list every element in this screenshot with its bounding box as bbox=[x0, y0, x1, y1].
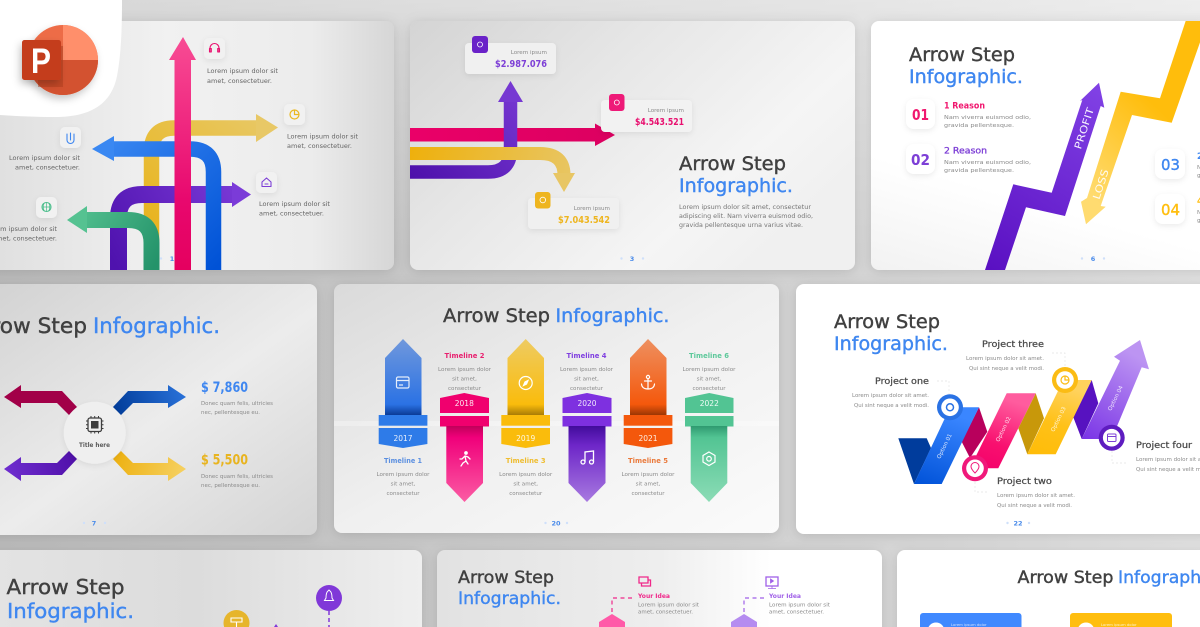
hub circle bbox=[64, 402, 126, 464]
item: 02: 02 bbox=[911, 151, 930, 169]
page number bbox=[544, 520, 568, 528]
timeline 2022: consectetur bbox=[692, 386, 726, 392]
item: 01: Nam viverra euismod odio, bbox=[944, 115, 1031, 121]
timeline 2020: Lorem ipsum dolor bbox=[560, 367, 614, 373]
panel: slide bottom right cards bbox=[897, 550, 1200, 627]
timeline 2019 bbox=[499, 339, 553, 497]
item: headphones: amet, consectetuer. bbox=[207, 78, 272, 85]
node: project one: Qui sint neque a velit modi. bbox=[854, 403, 929, 409]
idea: pink bbox=[599, 577, 700, 627]
timeline 2017 bbox=[376, 339, 430, 497]
item: paperclip: Lorem ipsum dolor sit bbox=[9, 155, 81, 162]
item: headphones: Lorem ipsum dolor sit bbox=[207, 68, 279, 75]
panel: slide 20 timeline bbox=[334, 284, 779, 533]
ribbon arrow: Option 01 bbox=[936, 433, 954, 460]
arrow: yellow right bbox=[144, 114, 278, 242]
panel: slide 6 profit and loss bbox=[871, 0, 1200, 270]
icon: PowerPoint logo: P bbox=[31, 42, 51, 81]
timeline 2019: consectetur bbox=[509, 491, 543, 497]
panel: slide 1 crossing arrows bbox=[0, 21, 394, 272]
heading: Arrow Step bbox=[6, 575, 124, 599]
item: home bbox=[256, 172, 331, 218]
card: yellow value: $7.043.542 bbox=[558, 215, 610, 226]
heading: Arrow Step bbox=[458, 568, 554, 588]
timeline 2021: Timeline 5 bbox=[628, 457, 668, 465]
value: 5,500: Donec quam felis, ultricies bbox=[201, 474, 273, 480]
panel: slide 22 ribbon arrow bbox=[796, 284, 1200, 534]
timeline 2020: consectetur bbox=[570, 386, 604, 392]
panel: slide 7 hub arrows bbox=[0, 284, 317, 535]
timeline 2022: sit amet, bbox=[697, 376, 722, 382]
item: 04: 04 bbox=[1161, 201, 1180, 219]
panel: slide bottom middle ideas bbox=[437, 550, 882, 627]
node: project one: Project one bbox=[875, 377, 929, 387]
heading: Infographic. bbox=[679, 175, 793, 197]
value: 5,500: $ 5,500 bbox=[201, 452, 248, 468]
node: project one: Lorem ipsum dolor sit amet. bbox=[852, 393, 929, 399]
icon: gear bbox=[703, 452, 715, 466]
timeline 2021: Lorem ipsum dolor bbox=[622, 472, 675, 478]
page number: 1 bbox=[170, 255, 175, 263]
card: yellow: Lorem ipsum dolor bbox=[1101, 622, 1137, 627]
card: blue: Lorem ipsum dolor bbox=[951, 622, 987, 627]
icon: anchor bbox=[642, 375, 654, 389]
icon: runner bbox=[460, 452, 470, 466]
white corner badge bbox=[0, 0, 122, 117]
idea: purple bbox=[731, 577, 831, 627]
timeline 2021: sit amet, bbox=[636, 482, 661, 488]
item: 01: 01 bbox=[912, 106, 929, 124]
ribbon arrow: Option 04 bbox=[1107, 385, 1125, 412]
heading bbox=[6, 575, 134, 623]
timeline 2019: Timeline 3 bbox=[506, 457, 546, 465]
value: 7,860 bbox=[201, 380, 273, 416]
heading bbox=[834, 311, 948, 355]
node: project two: Lorem ipsum dolor sit amet. bbox=[997, 493, 1075, 499]
arrow: green left bbox=[67, 206, 152, 272]
timeline 2022: 2022 bbox=[700, 399, 719, 408]
timeline 2018: Timeline 2 bbox=[444, 352, 485, 360]
ribbon arrow: Option 02 bbox=[995, 416, 1013, 443]
heading: Arrow Step bbox=[679, 153, 786, 175]
page number: 3 bbox=[630, 255, 634, 263]
arrow: pink up bbox=[169, 37, 196, 272]
node: project three: Project three bbox=[982, 340, 1044, 350]
arrow: profit: PROFIT bbox=[1073, 105, 1097, 151]
timeline 2018: Lorem ipsum dolor bbox=[438, 367, 492, 373]
idea: pink: Lorem ipsum dolor sit bbox=[638, 602, 700, 608]
value: 5,500: nec, pellentesque eu. bbox=[201, 483, 260, 489]
arrow: yellow bbox=[113, 451, 186, 481]
icon: card bbox=[396, 377, 409, 388]
arrow: purple right bbox=[118, 182, 251, 272]
icon: music bbox=[581, 451, 594, 464]
arrow: loss bbox=[1081, 0, 1200, 224]
arrow: purple bbox=[4, 451, 77, 481]
balloon: yellow bbox=[224, 610, 250, 627]
timeline 2018: 2018 bbox=[455, 399, 474, 408]
timeline 2020: 2020 bbox=[577, 399, 597, 408]
panel: slide bottom left balloons bbox=[0, 550, 422, 627]
card: yellow value: Lorem ipsum bbox=[574, 206, 610, 212]
item: 04 bbox=[1155, 194, 1200, 224]
page number bbox=[1081, 255, 1105, 263]
item: pie chart: Lorem ipsum dolor sit bbox=[287, 134, 359, 140]
timeline 2017: Lorem ipsum dolor bbox=[376, 472, 430, 478]
ribbon arrow: Option 03 bbox=[1050, 406, 1068, 433]
heading: Arrow Step bbox=[1018, 568, 1114, 588]
item: 02: 2 Reason bbox=[944, 146, 987, 156]
item: globe bbox=[0, 197, 58, 242]
idea: purple: Lorem ipsum dolor sit bbox=[769, 602, 831, 608]
card: yellow value bbox=[528, 192, 619, 229]
crossing arrows bbox=[67, 37, 278, 272]
timeline 2017: Timeline 1 bbox=[384, 457, 422, 465]
item: 02 bbox=[906, 144, 1031, 174]
arrow: pink right bbox=[410, 124, 615, 146]
heading: Infographic. bbox=[93, 314, 220, 338]
timeline 2019: Lorem ipsum dolor bbox=[499, 472, 553, 478]
icon: compass bbox=[519, 376, 532, 390]
idea: purple: amet, consectetuer. bbox=[769, 610, 824, 616]
node: project four: Project four bbox=[1136, 441, 1193, 451]
page number: 7 bbox=[92, 520, 96, 528]
text block bbox=[679, 204, 813, 229]
item: headphones bbox=[204, 38, 279, 85]
node: project two: Project two bbox=[997, 477, 1052, 487]
node: project three bbox=[966, 340, 1078, 393]
card: yellow bbox=[1070, 613, 1172, 627]
heading bbox=[909, 44, 1023, 88]
item: 01: gravida pellentesque. bbox=[944, 123, 1014, 129]
panel: slide 3 financial arrows bbox=[410, 21, 855, 270]
item: 01 bbox=[906, 99, 1031, 129]
heading: Infographic. bbox=[909, 66, 1023, 88]
balloon: purple rocket bbox=[316, 585, 342, 627]
heading: Arrow Step bbox=[443, 305, 550, 327]
timeline 2020 bbox=[560, 352, 614, 502]
idea: pink: amet, consectetuer. bbox=[638, 610, 693, 616]
arrow: profit bbox=[985, 83, 1104, 270]
item: paperclip: amet, consectetuer. bbox=[15, 164, 80, 172]
heading: Infographic. bbox=[7, 599, 134, 623]
idea: pink: Your Idea bbox=[637, 593, 670, 600]
timeline 2022: Lorem ipsum dolor bbox=[682, 367, 736, 373]
node: project two: Qui sint neque a velit modi. bbox=[997, 503, 1072, 509]
text block: gravida pellentesque urna varius vitae. bbox=[679, 222, 803, 229]
value: 7,860: $ 7,860 bbox=[201, 380, 248, 396]
arrow: blue left bbox=[92, 136, 214, 272]
card: pink value bbox=[601, 94, 692, 132]
timeline 2017: consectetur bbox=[386, 491, 420, 497]
card: pink value: Lorem ipsum bbox=[648, 108, 684, 114]
node: project three: Lorem ipsum dolor sit amet. bbox=[966, 356, 1044, 362]
node: project three: Qui sint neque a velit modi. bbox=[969, 366, 1044, 372]
timeline 2021: 2021 bbox=[638, 434, 658, 443]
timeline 2020: Timeline 4 bbox=[566, 352, 607, 360]
heading: Arrow Step bbox=[834, 311, 940, 333]
item: 01: 1 Reason bbox=[944, 102, 985, 112]
timeline 2017: 2017 bbox=[393, 434, 413, 443]
heading bbox=[458, 568, 561, 609]
value: 7,860: nec, pellentesque eu. bbox=[201, 410, 260, 416]
heading bbox=[0, 314, 220, 338]
heading: Infographic. bbox=[458, 589, 561, 609]
arrow: yellow down bbox=[410, 154, 575, 192]
icon: PowerPoint logo bbox=[22, 25, 98, 95]
timeline 2021 bbox=[622, 339, 675, 497]
page number: 22 bbox=[1013, 520, 1023, 528]
value: 7,860: Donec quam felis, ultricies bbox=[201, 401, 273, 407]
card: pink value: $4.543.521 bbox=[635, 117, 684, 128]
text block: adipiscing elit. Nam viverra euismod odio, bbox=[679, 213, 813, 220]
heading bbox=[443, 305, 670, 327]
heading: Infographic. bbox=[556, 305, 670, 327]
item: 03 bbox=[1155, 149, 1200, 179]
marker: small purple bbox=[274, 624, 278, 627]
item: 02: gravida pellentesque. bbox=[944, 168, 1014, 174]
item: pie chart: amet, consectetuer. bbox=[287, 143, 352, 150]
item: pie chart bbox=[284, 104, 359, 150]
card: purple value: $2.987.076 bbox=[495, 59, 547, 70]
node: project two bbox=[962, 455, 1075, 509]
page number: 6 bbox=[1091, 255, 1096, 263]
timeline 2021: consectetur bbox=[632, 491, 665, 497]
hub circle: Title here bbox=[79, 442, 110, 449]
timeline 2018 bbox=[438, 352, 492, 502]
value: 5,500 bbox=[201, 452, 273, 489]
item: paperclip bbox=[9, 127, 81, 172]
ribbon arrow bbox=[898, 340, 1149, 484]
timeline 2018: sit amet, bbox=[452, 376, 477, 382]
timeline 2017: sit amet, bbox=[391, 482, 416, 488]
timeline 2019: 2019 bbox=[516, 434, 535, 443]
node: project four bbox=[1099, 425, 1200, 473]
node: project one bbox=[852, 377, 963, 420]
page number bbox=[620, 255, 644, 263]
heading bbox=[1018, 568, 1200, 588]
heading: Infographic. bbox=[834, 333, 948, 355]
item: 02: Nam viverra euismod odio, bbox=[944, 160, 1031, 166]
icon: chip bbox=[86, 416, 104, 434]
item: 03: 03 bbox=[1161, 156, 1180, 174]
page number: 20 bbox=[551, 520, 561, 528]
arrow: purple up bbox=[410, 81, 523, 172]
card: purple value: Lorem ipsum bbox=[511, 50, 547, 56]
heading: Arrow Step bbox=[909, 44, 1015, 66]
text block: Lorem ipsum dolor sit amet, consectetur bbox=[679, 204, 811, 211]
item: home: Lorem ipsum dolor sit bbox=[259, 201, 331, 208]
timeline 2022 bbox=[682, 352, 736, 502]
idea: purple: Your Idea bbox=[768, 593, 801, 600]
arrow: blue bbox=[113, 385, 186, 415]
arrow: loss: LOSS bbox=[1092, 168, 1112, 201]
item: home: amet, consectetuer. bbox=[259, 210, 324, 218]
page number bbox=[1006, 520, 1030, 528]
heading bbox=[679, 153, 793, 197]
arrow: pink bbox=[4, 385, 77, 415]
timeline 2018: consectetur bbox=[448, 386, 482, 392]
card: blue bbox=[920, 613, 1022, 627]
page number bbox=[83, 520, 106, 528]
page number bbox=[160, 256, 174, 261]
timeline 2022: Timeline 6 bbox=[689, 352, 729, 360]
timeline 2019: sit amet, bbox=[513, 482, 538, 488]
card: purple value bbox=[465, 36, 556, 74]
timeline 2020: sit amet, bbox=[574, 376, 599, 382]
